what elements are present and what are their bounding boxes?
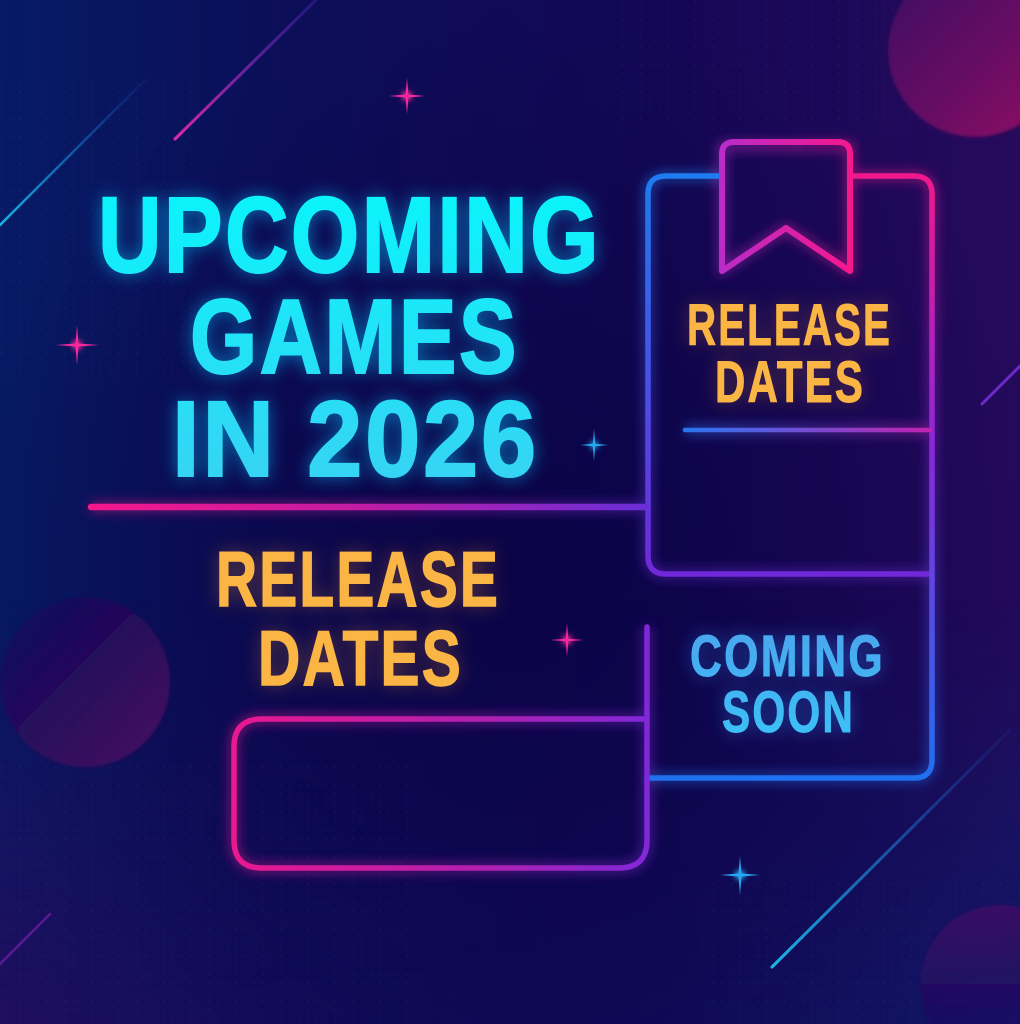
- title: IN 2026: [172, 378, 539, 499]
- sparkle stars: [56, 78, 760, 895]
- panel heading: coming soon: SOON: [722, 680, 855, 745]
- panel divider: [685, 428, 930, 432]
- title: [98, 174, 601, 499]
- bookmark icon: [722, 142, 850, 271]
- panel heading: release dates: DATES: [715, 350, 865, 415]
- subtitle: release dates left: [216, 535, 500, 702]
- star: right of title: [580, 429, 608, 461]
- panel heading: coming soon: COMING: [690, 624, 885, 689]
- title: GAMES: [190, 278, 519, 396]
- subtitle: release dates left: DATES: [258, 614, 463, 702]
- panel heading: coming soon: [690, 624, 885, 745]
- panel heading: coming soon: COMING: [690, 624, 885, 689]
- panel heading: release dates: [687, 293, 892, 415]
- panel heading: release dates: RELEASE: [687, 293, 892, 358]
- decorative circle: bottom right: [920, 905, 1020, 1024]
- star: left: [56, 325, 99, 365]
- subtitle: release dates left: RELEASE: [216, 535, 500, 623]
- coming soon panel outline: [650, 574, 932, 778]
- star: centre pink: [550, 623, 584, 657]
- title: IN 2026: [172, 378, 539, 499]
- panel heading: coming soon: SOON: [722, 680, 855, 745]
- panel heading: release dates: DATES: [715, 350, 865, 415]
- title: UPCOMING: [98, 174, 601, 295]
- panel heading: release dates: RELEASE: [687, 293, 892, 358]
- lower empty box: [234, 627, 647, 868]
- star: top centre: [389, 78, 425, 114]
- title: GAMES: [190, 278, 519, 396]
- subtitle: release dates left: DATES: [258, 614, 463, 702]
- decorative circle: left: [0, 597, 170, 767]
- title: UPCOMING: [98, 174, 601, 295]
- star: bottom blue: [720, 856, 760, 895]
- release dates panel outline: [648, 176, 932, 574]
- decorative circle: top right: [888, 0, 1020, 137]
- neon frame glow: [90, 146, 932, 868]
- title rule connector: [91, 504, 645, 510]
- subtitle: release dates left: RELEASE: [216, 535, 500, 623]
